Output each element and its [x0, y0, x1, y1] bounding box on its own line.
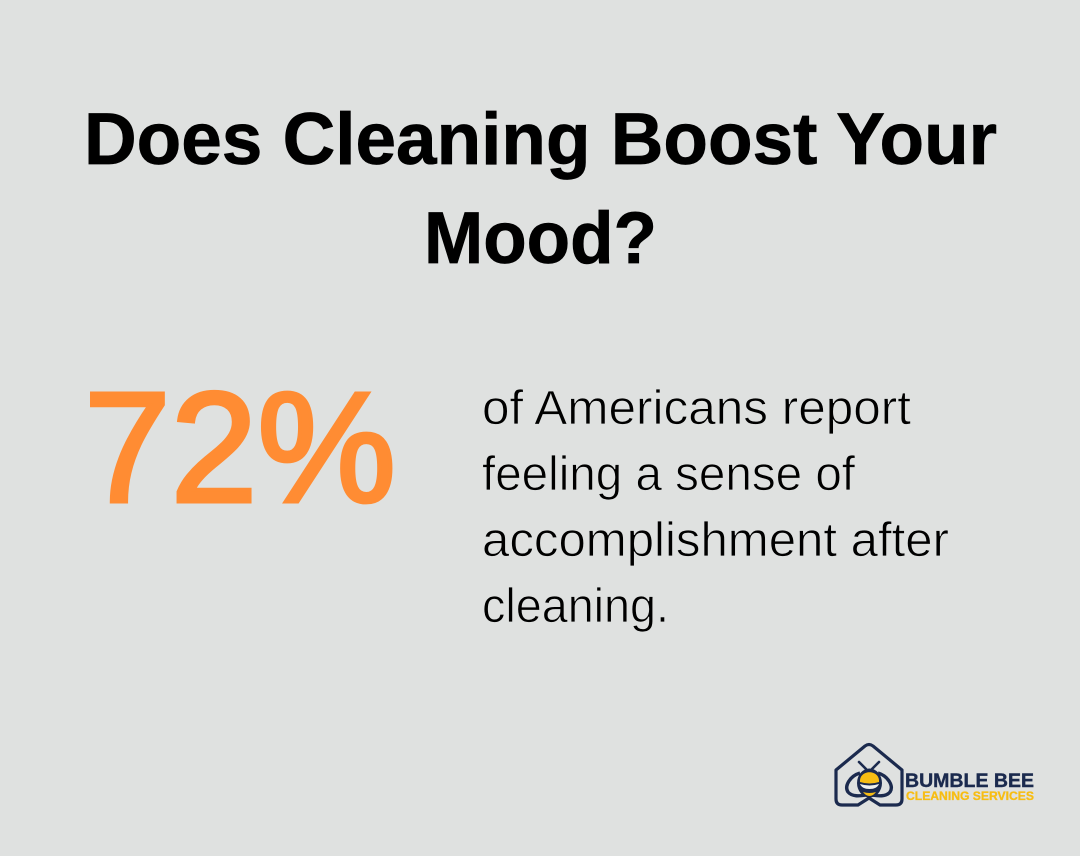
title: Does Cleaning Boost Your: [84, 99, 997, 180]
icon: house with bee: [836, 744, 902, 805]
description text: accomplishment after: [482, 514, 949, 567]
logo: Bumble Bee Cleaning Services: [836, 744, 1034, 805]
description text: cleaning.: [482, 580, 669, 633]
description text: feeling a sense of: [482, 448, 856, 501]
statistic: 72%: 72%: [84, 360, 396, 536]
description text: of Americans report: [482, 382, 911, 435]
title: [84, 99, 997, 279]
title: Mood?: [424, 198, 657, 279]
logo wordmark: BUMBLE BEE: [905, 770, 1034, 792]
logo tagline: CLEANING SERVICES: [906, 791, 1034, 803]
description text: [482, 382, 949, 633]
